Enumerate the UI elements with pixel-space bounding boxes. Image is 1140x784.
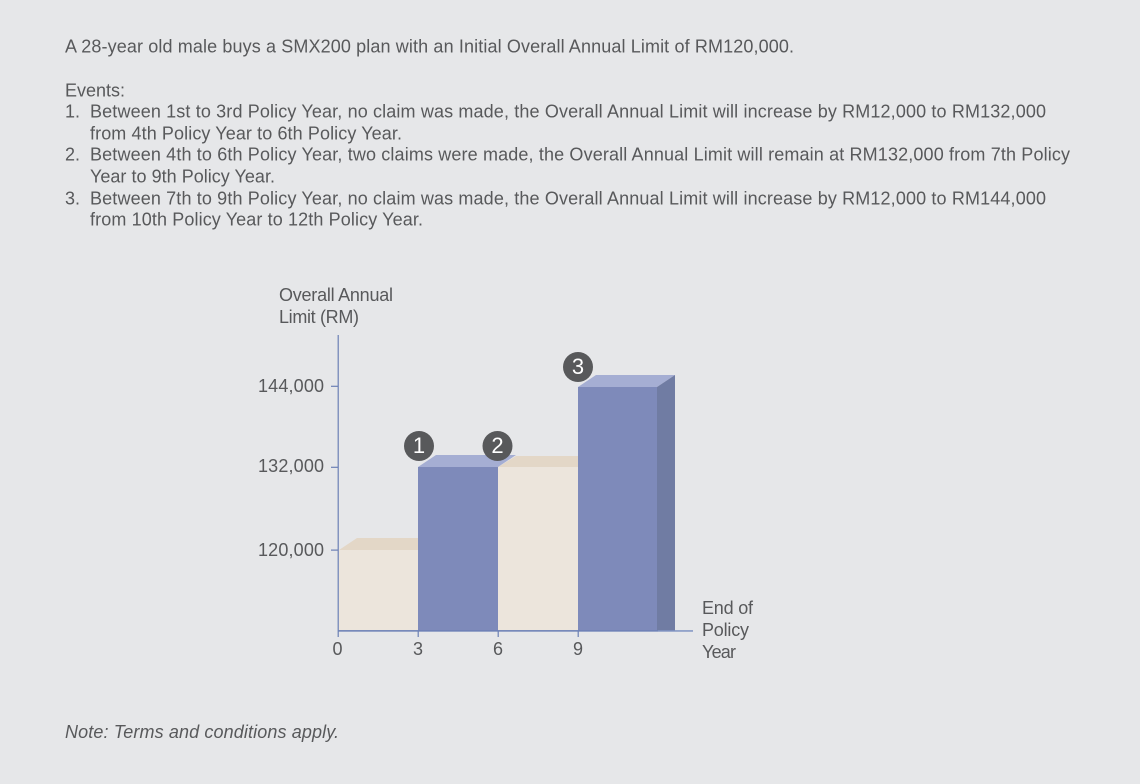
marker 1 — [404, 431, 434, 461]
events heading: Events: — [65, 80, 125, 100]
x axis labels: 0 — [332, 639, 343, 659]
y axis labels: 120,000 — [258, 540, 324, 560]
x axis labels: 3 — [413, 639, 423, 659]
event 1: 1. — [65, 102, 80, 122]
bar: years 3 to 6 at 132,000 — [418, 455, 516, 631]
note: Note: Terms and conditions apply. — [65, 722, 339, 742]
bar: years 0 to 3 at 120,000 — [339, 538, 418, 631]
event 3: 3. — [65, 188, 80, 208]
y axis title: Limit (RM) — [279, 307, 359, 327]
x axis labels: 9 — [573, 639, 583, 659]
y axis title: Overall Annual — [279, 285, 393, 305]
bar chart: overall annual limit by policy year — [258, 285, 754, 662]
event 2: 2. — [65, 144, 80, 164]
event 2: Between 4th to 6th Policy Year, two claims were made, the Overall Annual Limit will remain at RM132,000 from 7th Policy — [90, 144, 1070, 164]
marker 2 — [482, 431, 512, 461]
event 3 — [65, 188, 1046, 230]
event 1: Between 1st to 3rd Policy Year, no claim was made, the Overall Annual Limit will increase by RM12,000 to RM132,000 — [90, 102, 1046, 122]
event 1: from 4th Policy Year to 6th Policy Year. — [90, 124, 402, 144]
marker 2: 2 — [491, 433, 504, 458]
bar: years 9 to 12 at 144,000 — [578, 375, 675, 631]
bar: years 6 to 9 at 132,000 — [498, 456, 578, 631]
y axis labels — [258, 376, 324, 560]
y axis title — [279, 285, 393, 327]
marker 3 — [563, 352, 593, 382]
event 3: Between 7th to 9th Policy Year, no claim was made, the Overall Annual Limit will increase by RM12,000 to RM144,000 — [90, 188, 1046, 208]
marker 1: 1 — [413, 433, 425, 458]
x axis title — [702, 598, 754, 662]
x axis title: Year — [702, 642, 736, 662]
event 2: Year to 9th Policy Year. — [90, 166, 275, 186]
event 1 — [65, 102, 1046, 144]
text block: scenario introduction: A 28-year old male buys a SMX200 plan with an Initial Overall Annual Limit of RM120,000. — [65, 36, 794, 56]
marker 3: 3 — [572, 354, 584, 379]
y axis labels: 144,000 — [258, 376, 324, 396]
x axis — [338, 630, 693, 637]
x axis labels — [332, 639, 583, 659]
text block: events list — [65, 80, 1070, 230]
event 3: from 10th Policy Year to 12th Policy Year. — [90, 210, 423, 230]
y axis labels: 132,000 — [258, 456, 324, 476]
y axis — [331, 335, 339, 631]
x axis title: Policy — [702, 620, 749, 640]
event 2 — [65, 144, 1070, 186]
x axis title: End of — [702, 598, 754, 618]
x axis labels: 6 — [493, 639, 503, 659]
